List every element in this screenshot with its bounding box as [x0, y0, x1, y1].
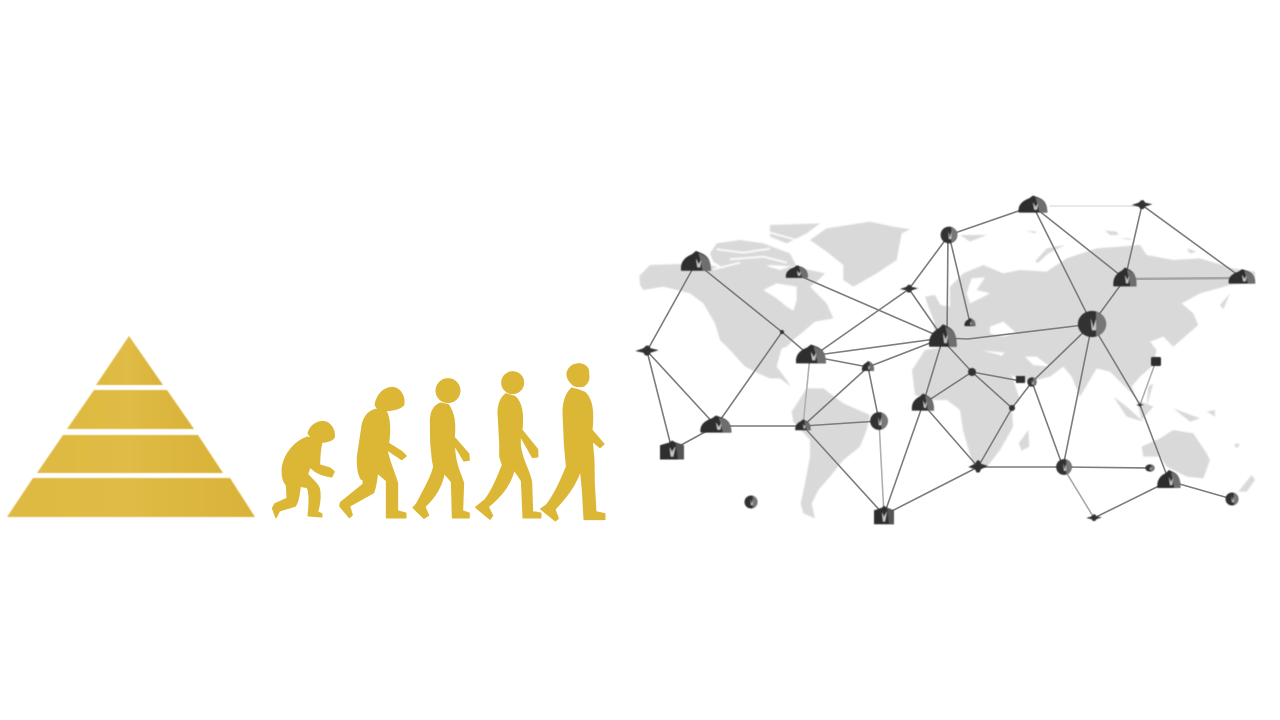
pyramid tier 4 (base)	[7, 478, 255, 517]
map: north america and greenland	[639, 222, 945, 387]
node: west africa	[912, 394, 934, 411]
pyramid tier 3	[37, 435, 223, 473]
node: far east	[1229, 269, 1255, 284]
node: indonesia	[1136, 403, 1144, 406]
node: peru	[795, 419, 811, 430]
node: southern africa	[968, 460, 988, 472]
figure 4: upright human	[476, 372, 541, 519]
network nodes	[635, 196, 1255, 524]
persian gulf	[1025, 357, 1050, 367]
map: eurasia and oceania	[933, 231, 1255, 492]
arctic channels	[713, 232, 797, 269]
evolution silhouettes	[273, 364, 605, 521]
node: east asia sea	[1151, 357, 1161, 366]
node: north atlantic	[900, 285, 918, 292]
pyramid	[7, 336, 255, 517]
pyramid tier 2	[67, 390, 194, 429]
new zealand	[1238, 475, 1255, 492]
black sea	[990, 322, 1017, 337]
world map	[639, 222, 1255, 518]
node: europe hub	[929, 324, 957, 347]
node: new zealand	[1225, 492, 1239, 506]
pyramid tier 1 (top)	[96, 336, 163, 385]
greenland	[810, 222, 910, 287]
new guinea	[1173, 408, 1200, 422]
node: central asia hub	[1078, 311, 1106, 337]
network connection lines	[647, 205, 1242, 518]
figure 1: crouching ape	[273, 422, 334, 517]
node: east africa	[1009, 405, 1015, 411]
baltic sea	[967, 277, 990, 303]
japan	[1220, 293, 1230, 309]
node: indian ocean	[1056, 459, 1072, 475]
node: bering sea	[1132, 200, 1152, 209]
hudson bay	[763, 283, 797, 311]
figure 3: early human	[413, 379, 469, 518]
map: africa	[912, 345, 1020, 467]
sumatra and java	[1113, 397, 1143, 422]
node: alaska	[681, 251, 711, 271]
node: arabia	[1027, 377, 1037, 387]
figure 5: modern human	[541, 364, 605, 521]
node: eastern europe	[964, 318, 976, 326]
eurasia	[933, 245, 1255, 398]
world map and network	[635, 196, 1255, 524]
node: northern canada	[786, 265, 808, 278]
node: southern australia	[1157, 470, 1181, 488]
north america	[639, 264, 833, 387]
australia	[1142, 430, 1210, 478]
borneo and philippines	[1137, 400, 1153, 420]
node: pacific south	[660, 440, 684, 460]
node: siberia	[1113, 267, 1137, 286]
node: isolated south pacific	[744, 495, 758, 509]
node: pacific centre	[700, 416, 731, 433]
node: red sea	[1016, 376, 1025, 383]
node: southern ocean	[1086, 514, 1102, 521]
node: south atlantic	[874, 506, 894, 524]
arctic archipelagos	[1035, 245, 1065, 263]
madagascar	[1019, 430, 1029, 451]
node: atlantic north	[862, 361, 874, 371]
node: western australia	[1145, 464, 1155, 472]
node: brazil	[870, 412, 888, 430]
map: south america	[792, 388, 870, 518]
figure 2: stooped hominid	[340, 388, 406, 518]
node: arctic	[1019, 196, 1047, 213]
node: north africa	[968, 368, 976, 376]
node: pacific north	[635, 346, 659, 356]
node: arctic atlantic	[941, 227, 957, 243]
arctic islands	[710, 240, 797, 270]
node: caribbean	[780, 330, 784, 334]
iceland and british isles	[925, 295, 945, 323]
node: north america hub	[796, 344, 826, 363]
